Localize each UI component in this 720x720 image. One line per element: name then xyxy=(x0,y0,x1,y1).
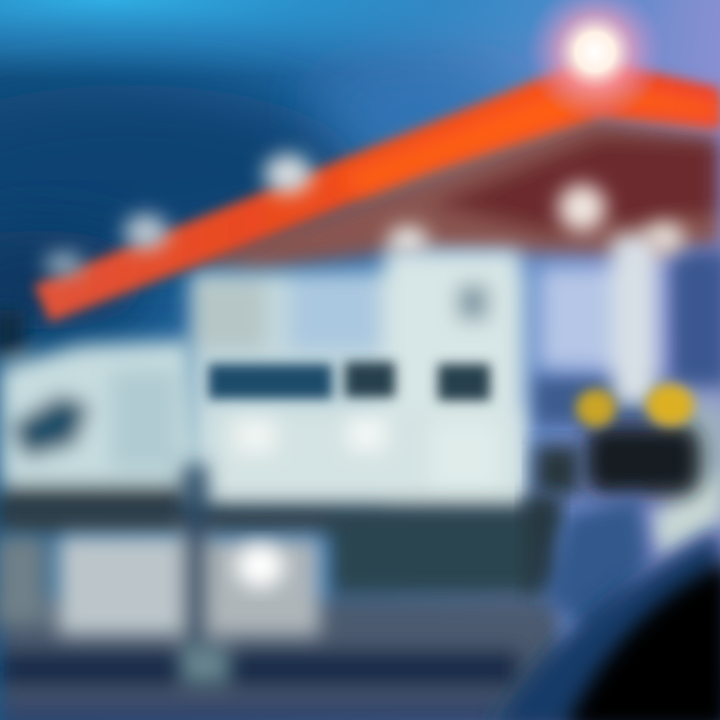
right background: distant blue wall xyxy=(530,250,720,425)
canopy red fascia xyxy=(34,58,720,322)
foreground vehicle panels xyxy=(0,465,320,685)
station windows xyxy=(208,362,490,402)
canopy underside xyxy=(190,115,720,270)
right side worker and pump xyxy=(525,400,720,640)
white vehicle left xyxy=(0,310,205,520)
glowing peak light xyxy=(525,0,665,122)
station building xyxy=(190,235,658,515)
dark foreground corner xyxy=(490,530,720,720)
white vehicle center xyxy=(210,410,520,505)
icon: yellow left lamp xyxy=(576,389,616,427)
canopy lights xyxy=(44,154,685,276)
dark ground band xyxy=(0,505,560,720)
foreground headlight xyxy=(236,544,284,588)
icon: yellow right lamp xyxy=(646,384,694,426)
